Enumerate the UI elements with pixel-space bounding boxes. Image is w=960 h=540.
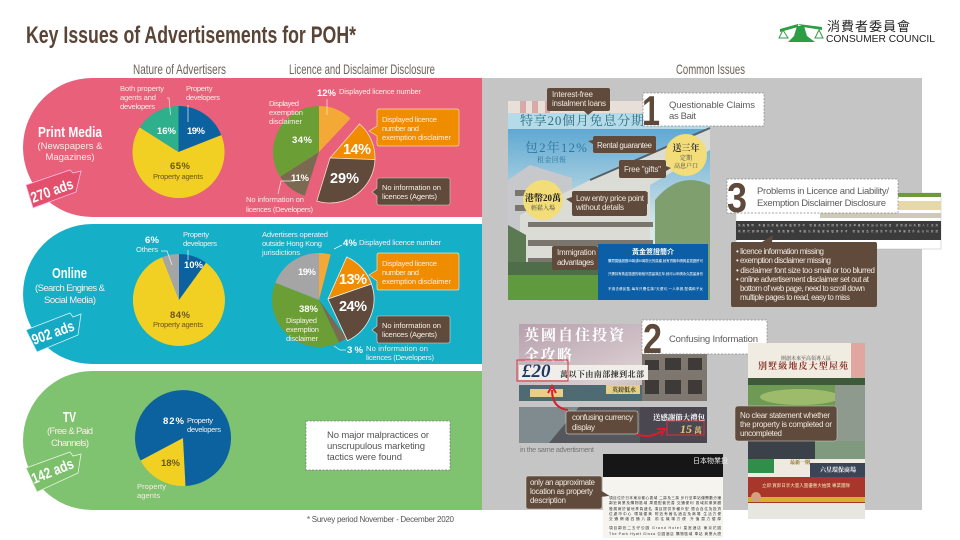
advert image: UK property currency: 全攻略 (524, 346, 572, 364)
pie: nature of advertisers, print: Property (186, 84, 213, 93)
online label: Social Media) (44, 295, 96, 306)
advert image: approximate location text (603, 454, 728, 538)
callout: displayed licence and exemption, online: exemption disclaimer (382, 277, 451, 286)
pie: nature of advertisers, TV (135, 390, 231, 500)
advert image: questionable claims: 只需持有黃金簽證的葡萄牙居留滿五年,就可以申請永久居留身份 (608, 271, 704, 276)
callout: displayed licence and exemption, print (369, 109, 459, 146)
advert image: approximate location text: 鄰近商業及購物區域 周邊配套完善 交通便利 區域前景樂觀 (609, 500, 721, 505)
pie: licence disclosure, print: No information on (246, 195, 304, 204)
advert image: UK property currency (517, 324, 707, 443)
pie: licence disclosure, online: Displayed licence number (359, 238, 441, 247)
advert image: questionable claims: 特享20個月免息分期 (520, 113, 644, 128)
advert image: licence disclaimer web page (736, 193, 941, 249)
pie: nature of advertisers, print: 19% (187, 126, 206, 137)
callout: displayed licence and exemption, online: number and (382, 268, 419, 277)
advert image: poster without completion statement (748, 343, 865, 519)
callout: no information agents, online: licences (Agents) (382, 330, 437, 339)
pie: licence disclosure, print: 11% (291, 173, 310, 184)
callout: free gifts (619, 160, 671, 178)
column heading: licence and disclaimer: Licence and Disclaimer Disclosure (289, 61, 435, 77)
pie: nature of advertisers, print: agents and (120, 93, 156, 102)
pie: licence disclosure, online: licences (Developers) (366, 353, 434, 362)
advert image: approximate location text: 位處市中心 環境優美 附近有著名酒店及商場 生活方便 (609, 511, 721, 516)
pie: licence disclosure, print: 29% (330, 171, 359, 187)
pie: licence disclosure, online: Advertisers operated (262, 230, 328, 239)
callout: no information agents, print: No information on (382, 183, 441, 192)
pie: licence disclosure, print: licences (Developers) (246, 205, 313, 214)
advert image: questionable claims: 購買價值超過35萬或50萬歐元的房產,就有資格申請黃金簽證許可 (608, 258, 704, 263)
pie: licence disclosure, online: Displayed (286, 316, 317, 325)
callout: only an approximate location: description (530, 496, 566, 505)
pie: nature of advertisers, TV: Property (137, 482, 166, 491)
advert image: poster without completion statement: 開創未來至高領導人區 (781, 355, 831, 362)
advert image: questionable claims: 包2年12% (525, 140, 587, 155)
callout: low entry price point: without details (575, 203, 624, 212)
pie: licence disclosure, online: 4% (343, 238, 358, 249)
heading 1: questionable claims as bait (642, 87, 764, 134)
advert image: poster without completion statement: 六星環保商場 (820, 466, 856, 474)
pie: nature of advertisers, print: 65% (170, 161, 191, 172)
callout: interest-free instalment loans: Interest-free (552, 90, 594, 99)
tag: 142 ads: 142 ads (29, 455, 76, 488)
callout: rental guarantee (588, 136, 656, 153)
callout: licence and disclaimer problems list: • online advertisement disclaimer set out at (736, 275, 870, 284)
pie: nature of advertisers, online: 6% (145, 235, 160, 246)
advert image: questionable claims: 港幣20萬 (525, 192, 561, 203)
pie: nature of advertisers, online: 10% (184, 260, 204, 271)
TV label: (Free & Paid (47, 426, 93, 437)
note: no major malpractices: unscrupulous marketing (327, 441, 425, 452)
column heading: common issues: Common Issues (676, 61, 745, 77)
TV label: TV (63, 409, 76, 426)
logo: Consumer Council: CONSUMER COUNCIL (826, 33, 935, 45)
pie: nature of advertisers, TV: Property (187, 416, 213, 425)
pie: nature of advertisers, online (133, 230, 225, 346)
note: no major malpractices: No major malpractices or (327, 430, 429, 441)
title: Key Issues of Advertisements for POH* (26, 22, 356, 49)
callout: no clear statement: uncompleted (740, 429, 782, 438)
pie: licence disclosure, print: 14% (343, 142, 371, 158)
heading 2: confusing information (642, 315, 767, 362)
advert image: approximate location text: 項目鄰近二五仔公園 Grand Hotel 皇宮酒店 東京花園 (609, 525, 721, 530)
callout: licence and disclaimer problems list: • disclaimer font size too small or too blurred (736, 266, 875, 275)
callout: no clear statement: No clear statement whether (740, 411, 830, 420)
advert image: approximate location text: 項目位於日本東京都心區域 二房及三房 步行至車站僅需數分鐘 (609, 495, 721, 500)
advert image: approximate location text: 日本物業投 (693, 456, 728, 465)
print media label (38, 124, 103, 163)
callout: only an approximate location (526, 476, 610, 509)
pie: licence disclosure, online: 38% (299, 304, 319, 315)
advert image: questionable claims: 高息户口 (674, 162, 698, 170)
callout: displayed licence and exemption, print: exemption disclaimer (382, 133, 451, 142)
pie: nature of advertisers, online: Property agents (153, 320, 203, 329)
advert image: poster without completion statement: 立即:買即日享大量入圍優惠大抽獎 專業團隊 (762, 482, 850, 489)
pie: licence disclosure, print: Displayed (269, 99, 299, 108)
advert image: UK property currency: 英鎊低水 (612, 386, 636, 394)
callout: rental guarantee: Rental guarantee (597, 141, 653, 150)
advert image: UK property currency: 英國自住投資 (524, 326, 626, 344)
callout: licence and disclaimer problems list: bottom of web page, need to scroll down (740, 284, 865, 293)
callout: confusing currency display: confusing currency (572, 413, 633, 422)
pie: licence disclosure, online: jurisdictions (261, 248, 300, 257)
pie: licence disclosure, online (261, 230, 441, 362)
advert image: licence disclaimer web page: 免責聲明 本廣告所載資料僅供參考 發展商及代理並不就其準確性作出任何保證 詳情請向有關人士查詢 (738, 223, 938, 227)
callout: no clear statement (735, 406, 837, 441)
heading 3: problems in licence and liability: Problems in Licence and Liability/ (757, 186, 889, 197)
callout: no information agents, online: No information on (382, 321, 441, 330)
advert image: UK property currency: 萬以下由南部揀到北部 (560, 369, 644, 379)
heading 3: problems in licence and liability: Exemption Disclaimer Disclosure (757, 198, 886, 209)
callout: displayed licence and exemption, online: Displayed licence (382, 259, 437, 268)
callout: displayed licence and exemption, print: Displayed licence (382, 115, 437, 124)
print media label: Print Media (38, 124, 103, 141)
heading 3: problems in licence and liability: 3 (727, 174, 747, 221)
footnote: survey period: * Survey period November - December 2020 (307, 515, 455, 524)
heading 2: confusing information: 2 (643, 315, 662, 362)
callout: immigration advantages: advantages (557, 258, 594, 267)
print media label: (Newspapers & (38, 141, 103, 152)
advert image: approximate location text: The Park Hyatt Ginza 公園酒店 購物區域 車站 商業大廈 (609, 531, 721, 536)
callout: licence and disclaimer problems list (731, 235, 877, 307)
callout: confusing currency display: display (572, 423, 595, 432)
advert image: questionable claims: 租金回報 (537, 155, 566, 164)
callout: no clear statement: the property is completed or (740, 420, 832, 429)
advert image: UK property currency: 15 (680, 422, 692, 436)
advert image: approximate location text: 發展商於當地享負盛名 項目提供多種戶型 適合自住及投資 (609, 506, 721, 511)
logo: Consumer Council (779, 19, 935, 45)
pie: licence disclosure, print: disclaimer (269, 117, 302, 126)
pie: nature of advertisers, TV: developers (187, 425, 221, 434)
online label: (Search Engines & (35, 283, 106, 294)
note: no major malpractices (306, 421, 450, 470)
pie: nature of advertisers, TV: agents (137, 491, 160, 500)
advert image: poster without completion statement: 最新一期 (790, 459, 810, 466)
heading 1: questionable claims as bait: as Bait (669, 111, 696, 122)
advert image: questionable claims: 定期 (680, 154, 692, 162)
heading 3: problems in licence and liability (727, 174, 898, 221)
TV label: Channels) (51, 438, 89, 449)
panel: print media (23, 78, 482, 217)
online label: Online (52, 265, 87, 282)
panel: TV (23, 371, 482, 510)
note: no major malpractices: tactics were found (327, 452, 402, 463)
callout: licence and disclaimer problems list: • exemption disclaimer missing (736, 256, 831, 265)
pie: nature of advertisers, online: developers (183, 239, 217, 248)
pie: licence disclosure, online: outside Hong Kong (262, 239, 322, 248)
pie: licence disclosure, online: 19% (298, 267, 317, 278)
callout: confusing currency display (566, 411, 638, 434)
pie: nature of advertisers, TV: 18% (161, 458, 181, 469)
pie: licence disclosure, print: 34% (292, 135, 313, 146)
advert image: questionable claims: 黃金簽證簡介 (632, 247, 674, 256)
pie: nature of advertisers, print: Both property (120, 84, 164, 93)
callout: only an approximate location: only an approximate (530, 478, 596, 487)
pie: nature of advertisers, print: developers (120, 102, 155, 111)
callout: interest-free instalment loans: instalment loans (552, 99, 606, 108)
caption: in the same advertisment: in the same advertisment (520, 445, 595, 454)
heading 1: questionable claims as bait: 1 (642, 87, 660, 134)
heading 1: questionable claims as bait: Questionable Claims (669, 100, 755, 111)
pie: nature of advertisers, print (120, 84, 225, 198)
callout: immigration advantages (552, 246, 598, 270)
pie: licence disclosure, print: 12% (317, 88, 337, 99)
callout: low entry price point (566, 191, 647, 216)
advert image: UK property currency: £20 (521, 361, 551, 382)
advert image: questionable claims (508, 101, 710, 300)
callout: displayed licence and exemption, online (369, 253, 459, 290)
pie: licence disclosure, print: Displayed licence number (339, 87, 421, 96)
callout: no information agents, print: licences (Agents) (382, 192, 437, 201)
callout: interest-free instalment loans (547, 88, 610, 115)
logo: Consumer Council: 消費者委員會 (827, 19, 910, 34)
pie: licence disclosure, online: 13% (339, 272, 367, 288)
TV label (47, 409, 93, 449)
callout: no information agents, online (372, 316, 450, 343)
pie: nature of advertisers, online: Property (183, 230, 209, 239)
tag: 902 ads: 902 ads (30, 318, 77, 349)
pie: nature of advertisers, TV: 82% (163, 416, 185, 427)
panel: online (23, 224, 482, 364)
callout: free gifts: Free "gifts" (624, 165, 661, 174)
advert image: approximate location text: 交通網絡四通八達 前往機場方便 升值潛力優厚 (609, 516, 721, 521)
pie: licence disclosure, online: 3% (347, 345, 364, 356)
heading 2: confusing information: Confusing Information (669, 334, 758, 345)
advert image: poster without completion statement: 別墅級地皮大型屋苑 (758, 360, 848, 371)
advert image: questionable claims: 輕鬆入場 (531, 204, 555, 212)
pie: nature of advertisers, online: 84% (170, 310, 191, 321)
pie: nature of advertisers, print: Property agents (153, 172, 203, 181)
column heading: nature of advertisers: Nature of Advertisers (133, 61, 226, 77)
arrow: red arrow to pound figure (548, 386, 568, 410)
pie: licence disclosure, online: No information on (366, 344, 428, 353)
advert image: UK property currency: 萬 (694, 425, 702, 435)
callout: low entry price point: Low entry price point (576, 194, 645, 203)
callout: displayed licence and exemption, print: number and (382, 124, 419, 133)
pie: nature of advertisers, online: Others (136, 245, 158, 254)
pie: licence disclosure, online: disclaimer (286, 334, 318, 343)
panel: common issues background (482, 78, 922, 510)
callout: licence and disclaimer problems list: multiple pages to read, easy to miss (740, 293, 850, 302)
advert image: licence disclaimer web page: 地產代理牌照號碼 免責聲明 本廣告所載資料僅供參考 發展商及代理並不就其準確性作出任何保證 (738, 229, 938, 233)
arrow: red arrow to 15 figure (635, 429, 665, 436)
pie: nature of advertisers, print: 16% (157, 126, 177, 137)
callout: no information agents, print (372, 178, 450, 205)
callout: licence and disclaimer problems list: • licence information missing (736, 247, 824, 256)
advert image: questionable claims: 不用去移民監,每年只需住滿7天便可,一人申請,配偶和子女 (608, 286, 704, 291)
tag: 270 ads: 270 ads (29, 176, 76, 207)
advert image: UK property currency: 送感謝節大禮包 (653, 412, 706, 422)
online label (35, 265, 106, 306)
callout: only an approximate location: location as property (530, 487, 593, 496)
callout: immigration advantages: Immigration (557, 248, 596, 257)
advert image: questionable claims: 送三年 (672, 142, 700, 153)
pie: licence disclosure, online: 24% (339, 299, 367, 315)
pie: nature of advertisers, print: developers (186, 93, 220, 102)
pie: licence disclosure, print: exemption (269, 108, 303, 117)
print media label: Magazines) (45, 152, 95, 163)
pie: licence disclosure, online: exemption (286, 325, 319, 334)
pie: licence disclosure, print (246, 87, 421, 214)
